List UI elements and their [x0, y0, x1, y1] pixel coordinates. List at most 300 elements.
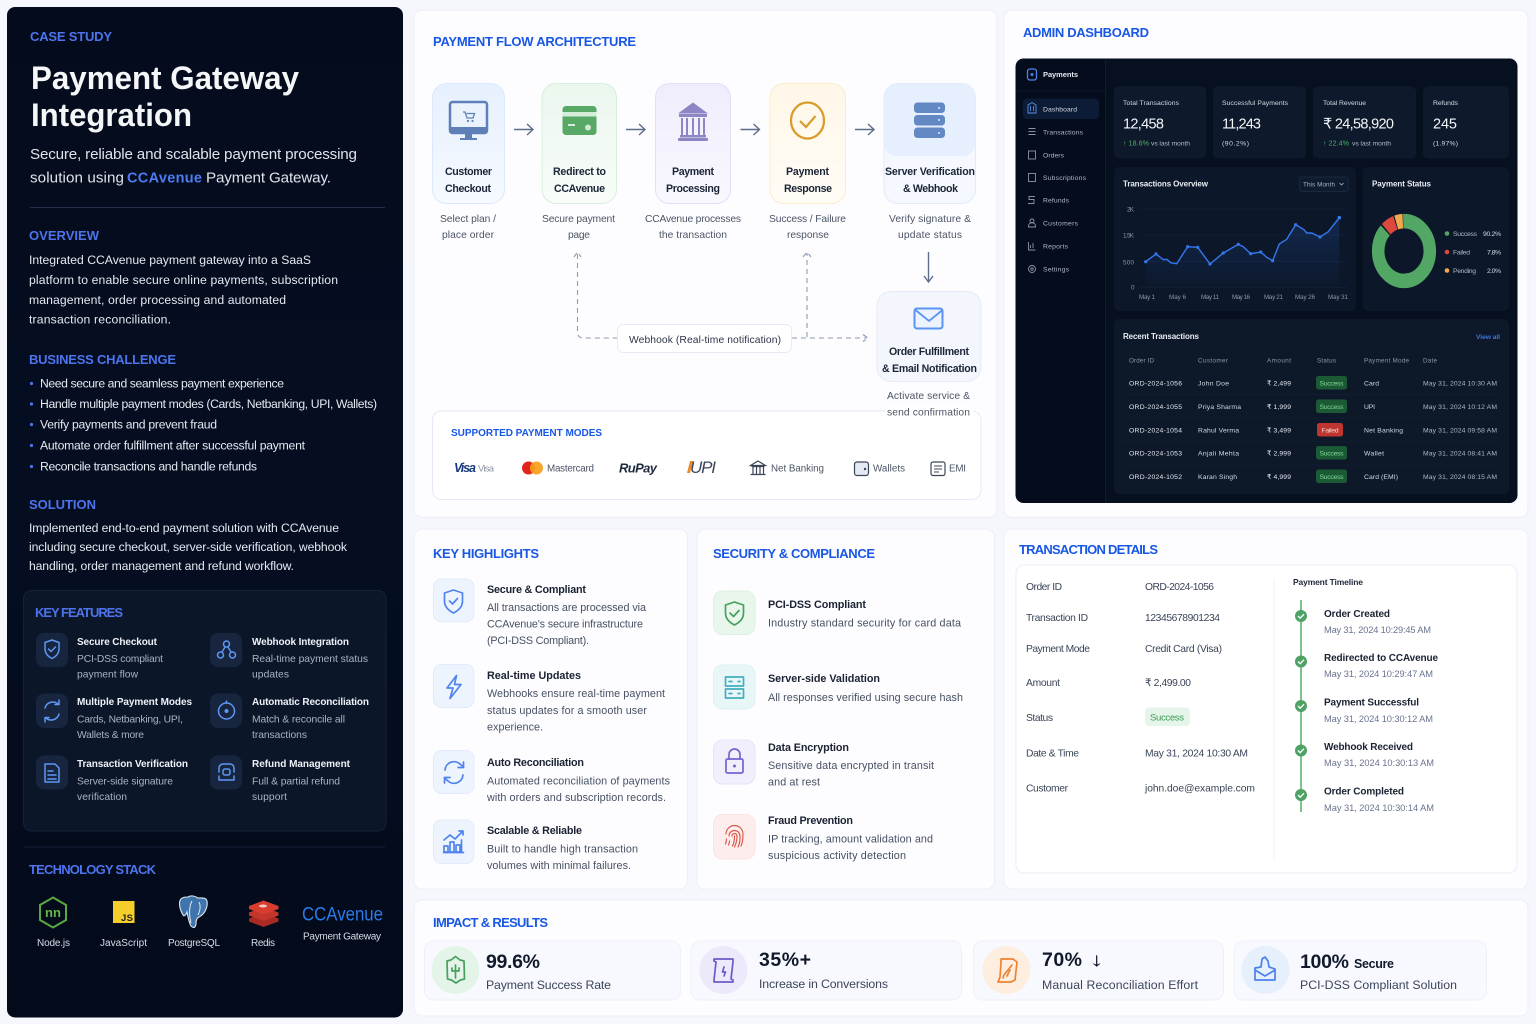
table row: May 31, 2024 09:58 AM — [1423, 428, 1497, 434]
chart: transactions overview: 0 — [1131, 284, 1135, 292]
section: business challenge: Reconcile transactions and handle refunds — [40, 460, 257, 474]
chart: payment status donut: Payment Status — [1372, 180, 1432, 188]
step: order fulfillment and email notification: Order Fulfillment — [889, 346, 969, 358]
metric: payment success rate: Payment Success Rate — [486, 978, 611, 992]
highlight: real-time updates — [434, 664, 665, 734]
details list: Status — [1026, 713, 1053, 724]
highlight: real-time updates: Real-time Updates — [487, 670, 581, 682]
stat card: total transactions: ↑ 18.6% — [1123, 140, 1149, 148]
highlight: scalable and reliable — [434, 820, 638, 872]
table: recent transactions: Payment Mode — [1364, 358, 1409, 364]
step description: the transaction — [659, 230, 727, 241]
mode: Visa — [454, 461, 495, 475]
step: payment processing: Processing — [666, 183, 720, 195]
item: PCI-DSS compliant: Industry standard security for card data — [768, 618, 961, 630]
step description — [889, 214, 971, 241]
payment timeline — [1293, 577, 1438, 813]
step description: place order — [442, 230, 495, 241]
table row: ₹ 2,499 — [1267, 380, 1291, 388]
metric: increase in conversions — [691, 941, 962, 1000]
step description: Verify signature & — [889, 214, 971, 225]
step: redirect to CCAvenue: Redirect to — [553, 166, 607, 178]
feature: webhook integration — [210, 633, 368, 680]
highlight: scalable and reliable: volumes with minimal failures. — [487, 860, 631, 872]
table row: Card — [1364, 380, 1379, 388]
feature: secure checkout: PCI-DSS compliant — [77, 654, 163, 665]
mode: Net Banking: Net Banking — [771, 464, 824, 474]
logo: Redis — [249, 900, 278, 949]
panel: supported payment modes — [432, 411, 981, 500]
stat card: total revenue: Total Revenue — [1323, 100, 1366, 107]
panel: security and compliance: SECURITY & COMPLIANCE — [713, 546, 875, 561]
highlight: auto reconciliation: with orders and subscription records. — [486, 792, 666, 804]
chart: transactions overview: This Month — [1303, 182, 1335, 188]
timeline step — [1295, 742, 1434, 768]
panel: admin dashboard — [1004, 10, 1528, 518]
chart: transactions overview: 1.5K — [1123, 232, 1135, 240]
step: order fulfillment and email notification — [877, 292, 981, 382]
chart: payment status donut: 2.0% — [1487, 268, 1501, 275]
panel: impact and results — [414, 900, 1528, 1016]
stat card: total transactions: Total Transactions — [1123, 100, 1180, 107]
table: recent transactions — [1114, 319, 1509, 494]
feature: transaction verification — [36, 756, 188, 803]
table row — [1129, 400, 1497, 413]
table row: ORD-2024-1056 — [1129, 380, 1182, 388]
sidebar navigation: Reports — [1043, 244, 1069, 250]
timeline step: May 31, 2024 10:30:12 AM — [1324, 714, 1433, 724]
logo: CCAvenue payment gateway: CCAvenue — [302, 904, 383, 926]
table row — [1129, 446, 1497, 460]
timeline step: Payment Successful — [1324, 698, 1419, 708]
table row: ORD-2024-1052 — [1129, 474, 1182, 481]
details list: Amount — [1026, 678, 1060, 689]
stat card: total revenue: ↑ 22.4% — [1323, 140, 1349, 148]
subtitle: Payment Gateway. — [206, 170, 331, 186]
highlight: auto reconciliation: Automated reconciliation of payments — [487, 776, 671, 788]
highlight: real-time updates: status updates for a smooth user — [487, 705, 647, 717]
table row: ₹ 2,999 — [1267, 450, 1291, 458]
feature: refund management: support — [252, 792, 287, 803]
stat card: successful payments: 11,243 — [1222, 116, 1261, 132]
logo: CCAvenue payment gateway: Payment Gateway — [303, 932, 381, 942]
table row: ORD-2024-1054 — [1129, 428, 1182, 434]
metric: manual reconciliation effort: Manual Reconciliation Effort — [1042, 978, 1199, 992]
arrow: webhook dashed to order fulfillment — [792, 334, 868, 342]
panel: payment flow architecture — [414, 10, 997, 518]
item: server-side validation — [714, 665, 963, 709]
step description: update status — [898, 230, 962, 241]
table row: May 31, 2024 10:30 AM — [1423, 380, 1497, 388]
table row — [1129, 470, 1497, 483]
stat card: refunds — [1423, 86, 1509, 158]
step: customer checkout: Checkout — [445, 183, 491, 195]
stat card: total revenue: ₹ 24,58,920 — [1323, 116, 1394, 132]
table row: Karan Singh — [1198, 474, 1237, 481]
chart: transactions overview: 2K — [1127, 206, 1135, 214]
item: data encryption — [714, 740, 934, 788]
timeline step — [1295, 653, 1438, 679]
table: recent transactions: Amount — [1267, 358, 1291, 364]
chart: payment status donut: Pending — [1453, 268, 1476, 275]
table: recent transactions: Order ID — [1129, 358, 1154, 364]
mode: Net Banking — [750, 461, 824, 474]
feature: automatic reconciliation — [210, 694, 369, 741]
table: recent transactions: Recent Transactions — [1123, 332, 1200, 341]
step description — [542, 214, 615, 241]
feature: transaction verification: Transaction Verification — [77, 759, 188, 770]
section: solution: Implemented end-to-end payment solution with CCAvenue — [29, 521, 339, 535]
stat card: total revenue — [1313, 86, 1416, 158]
item: fraud prevention: Fraud Prevention — [768, 815, 853, 827]
timeline step — [1295, 786, 1434, 813]
table row: Card (EMI) — [1364, 474, 1398, 481]
logo: JavaScript — [100, 901, 147, 949]
metric: manual reconciliation effort — [974, 941, 1224, 1000]
section: business challenge: Handle multiple payment modes (Cards, Netbanking, UPI, Wallets) — [40, 397, 377, 411]
details list: Transaction ID — [1026, 613, 1088, 624]
step: customer checkout: Customer — [445, 166, 492, 178]
chart: payment status donut: 90.2% — [1483, 231, 1501, 238]
table row: ₹ 4,999 — [1267, 474, 1291, 481]
step description: order fulfillment: send confirmation — [887, 408, 970, 418]
status badge — [1145, 708, 1190, 726]
mode: Wallets: Wallets — [873, 464, 905, 474]
highlight: scalable and reliable: Scalable & Reliable — [487, 825, 582, 837]
step description: CCAvenue processes — [645, 214, 741, 225]
feature: webhook integration: updates — [252, 670, 289, 680]
sidebar navigation: Subscriptions — [1043, 175, 1087, 182]
item: server-side validation: All responses verified using secure hash — [768, 692, 963, 704]
arrow — [855, 124, 874, 135]
subtitle: solution using — [30, 170, 124, 186]
metric: manual reconciliation effort: ↓ — [1089, 950, 1104, 971]
highlight: secure and compliant: (PCI-DSS Compliant). — [487, 635, 589, 647]
subtitle: Secure, reliable and scalable payment processing — [30, 146, 357, 163]
table row: Success — [1320, 474, 1344, 481]
item: PCI-DSS compliant — [714, 591, 961, 634]
step description: Select plan / — [440, 214, 496, 225]
details list: Payment Mode — [1026, 644, 1090, 655]
chart: transactions overview: Transactions Overview — [1123, 180, 1209, 188]
metric: PCI-DSS compliant solution: 100% — [1300, 951, 1349, 973]
item: fraud prevention: suspicious activity detection — [768, 850, 906, 862]
title: Payment Gateway — [31, 60, 299, 96]
webhook label: Webhook (Real-time notification) — [629, 335, 781, 346]
webhook label — [618, 324, 792, 352]
sidebar navigation: Orders — [1043, 152, 1065, 160]
highlight: secure and compliant — [434, 579, 646, 647]
chart: transactions overview: May 6 — [1169, 294, 1186, 301]
table row: May 31, 2024 08:41 AM — [1423, 450, 1497, 458]
details list: ₹ 2,499.00 — [1145, 678, 1191, 689]
chart: transactions overview — [1114, 167, 1356, 311]
table row: May 31, 2024 10:12 AM — [1423, 404, 1497, 411]
table row: Wallet — [1364, 450, 1384, 458]
feature: automatic reconciliation: Automatic Reconciliation — [252, 697, 369, 708]
stat card: refunds: (1.97%) — [1433, 140, 1458, 148]
mode: RuPay: RuPay — [619, 460, 658, 476]
feature: multiple payment modes: Cards, Netbanking, UPI, — [77, 714, 183, 726]
table: recent transactions: Customer — [1198, 358, 1228, 364]
logo: PostgreSQL — [168, 896, 220, 949]
highlight: auto reconciliation — [434, 750, 671, 804]
section: overview: transaction reconciliation. — [29, 312, 171, 326]
table row: May 31, 2024 08:15 AM — [1423, 474, 1497, 481]
payment timeline: Payment Timeline — [1293, 577, 1363, 587]
metric: PCI-DSS compliant solution: Secure — [1354, 957, 1394, 971]
metric: manual reconciliation effort: 70% — [1042, 949, 1082, 971]
highlight: secure and compliant: Secure & Compliant — [487, 584, 586, 596]
panel: impact and results: IMPACT & RESULTS — [433, 915, 548, 930]
stat card: total transactions: vs last month — [1151, 140, 1190, 148]
mode: Mastercard: Mastercard — [547, 464, 594, 474]
sidebar navigation: Refunds — [1043, 198, 1070, 204]
section: business challenge: Need secure and seamless payment experience — [40, 376, 284, 390]
sidebar navigation: Payments — [1043, 70, 1078, 79]
step description: Success / Failure — [769, 214, 846, 225]
step: server verification and webhook: Server Verification — [885, 166, 975, 178]
table row: ORD-2024-1053 — [1129, 450, 1182, 458]
logo: Node.js: Node.js — [37, 938, 70, 949]
step: payment processing: Payment — [672, 166, 714, 178]
sidebar navigation: Settings — [1043, 266, 1070, 274]
section: solution — [29, 497, 348, 573]
mode: Wallets — [854, 462, 905, 476]
timeline step: May 31, 2024 10:30:14 AM — [1324, 803, 1434, 813]
step: customer checkout — [432, 84, 504, 204]
section: solution: handling, order management and refund workflow. — [29, 559, 294, 573]
step: payment response: Payment — [786, 166, 829, 178]
table row: Net Banking — [1364, 428, 1403, 434]
step description: Secure payment — [542, 214, 615, 225]
section: technology stack: TECHNOLOGY STACK — [29, 862, 157, 877]
section: overview: OVERVIEW — [29, 228, 100, 243]
step: server verification and webhook: & Webhook — [903, 183, 958, 195]
feature: webhook integration: Webhook Integration — [252, 637, 349, 648]
chart: transactions overview: May 11 — [1201, 294, 1219, 301]
logo: Redis: Redis — [251, 938, 275, 949]
chart: payment status donut: Failed — [1453, 250, 1470, 256]
title — [31, 60, 299, 133]
chart: transactions overview: May 26 — [1295, 294, 1315, 301]
table row: John Doe — [1198, 380, 1229, 388]
details list: Order ID — [1026, 582, 1062, 593]
metric: payment success rate: 99.6% — [486, 951, 540, 973]
timeline step: Webhook Received — [1324, 742, 1413, 753]
item: fraud prevention: IP tracking, amount validation and — [768, 834, 933, 846]
table: recent transactions: Status — [1317, 358, 1336, 364]
highlight: secure and compliant: CCAvenue's secure infrastructure — [487, 618, 643, 630]
chart: transactions overview: May 1 — [1139, 294, 1155, 301]
sidebar navigation: Customers — [1043, 220, 1079, 228]
section: overview: Integrated CCAvenue payment gateway into a SaaS — [29, 253, 311, 267]
stat card: successful payments: (90.2%) — [1222, 140, 1249, 148]
timeline step: Order Created — [1324, 609, 1390, 620]
table row: Rahul Verma — [1198, 428, 1239, 434]
mode: UPI: UPI — [690, 458, 716, 477]
sidebar navigation: Dashboard — [1043, 106, 1077, 114]
timeline step: May 31, 2024 10:30:13 AM — [1324, 758, 1434, 768]
panel: key highlights — [414, 529, 688, 889]
sidebar navigation: Transactions — [1043, 130, 1084, 136]
arrow: down to order fulfillment — [924, 252, 933, 282]
chart: transactions overview: May 16 — [1232, 294, 1250, 301]
stat card: refunds: Refunds — [1433, 100, 1459, 107]
subtitle — [30, 146, 357, 186]
table row: ₹ 3,499 — [1267, 428, 1291, 434]
feature: multiple payment modes: Multiple Payment Modes — [77, 697, 192, 708]
feature: refund management — [210, 756, 351, 803]
step: order fulfillment and email notification: & Email Notification — [882, 363, 977, 375]
step: redirect to CCAvenue: CCAvenue — [554, 183, 605, 195]
panel: transaction details: TRANSACTION DETAILS — [1019, 542, 1158, 557]
stat card: total transactions — [1114, 86, 1206, 158]
sidebar navigation — [1023, 69, 1099, 274]
feature: refund management: Refund Management — [252, 759, 351, 770]
table row: UPI — [1364, 404, 1375, 411]
step: server verification and webhook — [884, 84, 976, 204]
stat card: successful payments — [1213, 86, 1306, 158]
feature: transaction verification: verification — [77, 792, 127, 803]
step description: order fulfillment: Activate service & — [887, 391, 970, 402]
title: Integration — [31, 97, 192, 133]
mode: Mastercard — [522, 462, 594, 474]
panel: left case study sidebar — [7, 7, 403, 1018]
details list: Credit Card (Visa) — [1145, 644, 1222, 655]
step description — [440, 214, 496, 241]
item: data encryption: Sensitive data encrypted in transit — [768, 760, 934, 772]
step description — [769, 214, 846, 241]
panel: key features: KEY FEATURES — [35, 605, 123, 620]
feature: secure checkout — [36, 633, 163, 680]
step: redirect to CCAvenue — [542, 84, 616, 204]
details list: john.doe@example.com — [1144, 784, 1255, 794]
feature: webhook integration: Real-time payment status — [252, 654, 368, 665]
stat card: total transactions: 12,458 — [1123, 116, 1164, 132]
chart: payment status donut — [1363, 167, 1509, 311]
logo: PostgreSQL: PostgreSQL — [168, 938, 220, 949]
feature: secure checkout: payment flow — [77, 670, 139, 680]
timeline step — [1295, 698, 1433, 724]
timeline step: Redirected to CCAvenue — [1324, 653, 1438, 664]
mode: EMI — [931, 462, 966, 476]
arrow — [626, 124, 645, 135]
arrow: webhook dashed to payment response — [803, 252, 811, 337]
arrow — [514, 124, 533, 135]
step description — [645, 214, 741, 241]
item: fraud prevention — [714, 814, 933, 862]
metric: PCI-DSS compliant solution: PCI-DSS Compliant Solution — [1300, 978, 1457, 992]
table row — [1129, 423, 1497, 436]
status badge: Success — [1150, 712, 1184, 724]
mode: Visa: Visa — [478, 464, 495, 474]
section: business challenge — [29, 352, 377, 474]
details list: May 31, 2024 10:30 AM — [1145, 748, 1248, 760]
section: overview: management, order processing and automated — [29, 293, 286, 307]
table row: Priya Sharma — [1198, 404, 1241, 411]
table row — [1129, 376, 1497, 390]
item: data encryption: Data Encryption — [768, 742, 849, 754]
timeline step: May 31, 2024 10:29:45 AM — [1324, 625, 1431, 635]
section: overview: platform to enable secure online payments, subscription — [29, 273, 338, 287]
metric: PCI-DSS compliant solution — [1234, 941, 1486, 1000]
table: recent transactions: Date — [1423, 358, 1437, 364]
subtitle: CCAvenue — [127, 170, 202, 186]
highlight: auto reconciliation: Auto Reconciliation — [487, 757, 584, 769]
item: PCI-DSS compliant: PCI-DSS Compliant — [768, 599, 866, 611]
table row: Success — [1320, 450, 1344, 458]
heading: PAYMENT FLOW ARCHITECTURE — [433, 34, 636, 49]
feature: refund management: Full & partial refund — [252, 776, 340, 788]
feature: secure checkout: Secure Checkout — [77, 637, 158, 648]
step description: response — [787, 230, 829, 241]
stat card: refunds: 245 — [1433, 116, 1457, 132]
chart: transactions overview: 500 — [1123, 260, 1134, 266]
logo: Node.js — [37, 898, 70, 949]
table row: Failed — [1322, 428, 1339, 434]
step: payment response: Response — [784, 183, 832, 195]
table row: ₹ 1,999 — [1267, 404, 1291, 411]
section: solution: SOLUTION — [29, 497, 96, 512]
details list: Date & Time — [1026, 748, 1079, 760]
details list — [1026, 582, 1255, 794]
feature: multiple payment modes: Wallets & more — [77, 730, 144, 741]
table row: Success — [1320, 404, 1344, 411]
panel: key features — [24, 590, 386, 831]
chart: transactions overview: May 21 — [1264, 294, 1283, 301]
logo: CCAvenue payment gateway — [302, 904, 383, 942]
mode: Visa: Visa — [454, 461, 476, 475]
section: business challenge: Automate order fulfillment after successful payment — [40, 438, 306, 452]
section: solution: including secure checkout, server-side verification, webhook — [29, 540, 348, 554]
chart: payment status donut: 7.8% — [1487, 250, 1501, 256]
step description: order fulfillment — [885, 391, 973, 420]
details list: 12345678901234 — [1145, 613, 1220, 624]
table row: Success — [1320, 380, 1344, 388]
metric: increase in conversions: Increase in Conversions — [759, 977, 888, 991]
metric: payment success rate — [424, 941, 680, 1000]
feature: automatic reconciliation: transactions — [252, 730, 307, 741]
table row: ORD-2024-1055 — [1129, 404, 1182, 411]
stat card: successful payments: Successful Payments — [1222, 100, 1289, 107]
section: business challenge: BUSINESS CHALLENGE — [29, 352, 176, 367]
panel: key highlights: KEY HIGHLIGHTS — [433, 546, 539, 561]
step: payment response — [770, 84, 846, 204]
panel: security and compliance — [697, 529, 994, 889]
section: overview — [29, 228, 338, 326]
chart: transactions overview: May 31 — [1328, 294, 1348, 301]
stat card: total revenue: vs last month — [1352, 140, 1391, 148]
step: payment processing — [656, 84, 730, 204]
step description: page — [568, 230, 590, 241]
heading: ADMIN DASHBOARD — [1023, 25, 1149, 40]
item: data encryption: and at rest — [768, 776, 820, 788]
logo: JavaScript: JavaScript — [100, 938, 147, 949]
arrow — [740, 124, 760, 135]
timeline step — [1295, 609, 1431, 635]
highlight: real-time updates: Webhooks ensure real-time payment — [487, 688, 665, 700]
table: recent transactions: View all — [1476, 334, 1500, 341]
eyebrow: case study: CASE STUDY — [30, 29, 112, 44]
feature: transaction verification: Server-side signature — [77, 776, 173, 788]
feature: multiple payment modes — [36, 694, 192, 741]
mode: EMI: EMI — [949, 464, 966, 474]
details list: ORD-2024-1056 — [1145, 582, 1214, 593]
panel: transaction details — [1004, 529, 1528, 889]
highlight: scalable and reliable: Built to handle high transaction — [487, 844, 638, 856]
chart: payment status donut: Success — [1453, 231, 1478, 238]
